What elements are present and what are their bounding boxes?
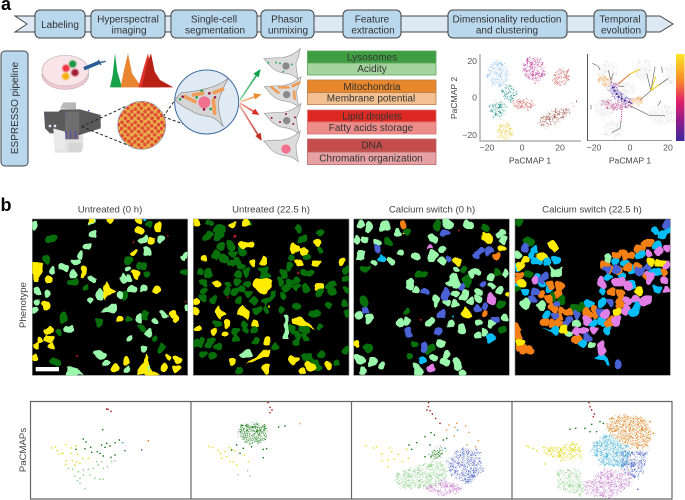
PaCMAP strip: [30, 402, 672, 499]
step: Hyperspectral imaging: [91, 10, 165, 38]
ESPRESSO pipeline side label: [1, 51, 28, 166]
feature rows: [308, 51, 436, 164]
arrow: to lipid droplets: [240, 103, 259, 115]
row: membrane potential: Membrane potential: [327, 94, 415, 104]
row label: Phenotype: Phenotype: [18, 282, 29, 328]
cell: DNA labelled: [264, 131, 300, 162]
icon: magnified single cell: [175, 70, 239, 134]
step: Labeling: [35, 10, 85, 38]
colour bar: [676, 54, 684, 141]
arrow: to mitochondria: [241, 93, 262, 102]
step: Hyperspectral imaging: Hyperspectral: [97, 14, 159, 26]
step: Phasor unmixing: [261, 10, 314, 38]
arrow: to DNA: [239, 105, 262, 141]
column title: Calcium switch 0 h: Calcium switch (0 h): [389, 204, 475, 216]
ESPRESSO pipeline side label: ESPRESSO pipeline: [10, 61, 21, 154]
step: Hyperspectral imaging: imaging: [111, 26, 147, 36]
row label: PaCMAPs: PaCMAPs: [18, 428, 29, 472]
tick labels: [462, 56, 565, 152]
icon: segmented cell field: [118, 101, 166, 149]
banner arrow band: [15, 16, 673, 32]
grey background clusters: [595, 59, 681, 139]
column title: Untreated 22.5 h: Untreated (22.5 h): [232, 204, 310, 216]
phenotype image: untreated 22.5 h: [193, 219, 349, 375]
chart: emission spectra: [110, 53, 173, 87]
schematic illustration: [42, 49, 301, 162]
step: Single-cell segmentation: Single-cell: [191, 14, 237, 26]
tick labels: [587, 142, 673, 152]
PaCMAP: calcium switch 0 h: [366, 403, 483, 496]
lineage trajectories: [591, 63, 668, 133]
step: Temporal evolution: [594, 10, 646, 38]
coloured pseudotime paths: [630, 69, 659, 91]
cell: lipid droplets labelled: [264, 103, 301, 134]
arrow: to lysosomes: [240, 69, 261, 100]
PaCMAP frame: [30, 402, 672, 499]
step: Feature extraction: Feature: [355, 14, 390, 26]
row: lipid droplets: Lipid droplets: [342, 112, 402, 122]
scatter plot: PaCMAP clusters: [449, 54, 581, 166]
tick labels: 0: [472, 92, 477, 102]
row: DNA: DNA: [361, 140, 383, 152]
column title: Calcium switch 22.5 h: Calcium switch (22.5 h): [542, 204, 642, 216]
step: Labeling: Labeling: [41, 20, 79, 31]
step: Feature extraction: [343, 10, 401, 38]
tick labels: 0: [628, 142, 633, 152]
row: acidity: Acidity: [357, 64, 387, 75]
icon: microscope: [44, 102, 101, 153]
phenotype image: calcium switch 22.5 h: [515, 219, 670, 375]
icon: zoom guide lines: [82, 100, 183, 147]
pipeline banner: [15, 10, 673, 38]
tick labels: −20: [587, 142, 602, 152]
step: Feature extraction: extraction: [351, 26, 395, 36]
step: Dimensionality reduction and clustering: Dimensionality reduction: [453, 14, 561, 26]
step: Single-cell segmentation: [171, 10, 257, 38]
step: Temporal evolution: evolution: [601, 26, 641, 36]
PaCMAP: untreated 22.5 h: [209, 403, 300, 476]
cell: mitochondria labelled: [264, 77, 301, 107]
axes: [480, 54, 581, 141]
step: Single-cell segmentation: segmentation: [185, 26, 245, 36]
cell: lysosome labelled: [264, 49, 300, 79]
tick labels: 20: [555, 142, 565, 152]
trajectory plot: [587, 54, 684, 166]
phenotype image: untreated 0 h: [32, 219, 188, 375]
row: fatty acids storage: Fatty acids storage: [329, 123, 414, 134]
step: Dimensionality reduction and clustering: [448, 10, 567, 38]
step: Temporal evolution: Temporal: [599, 14, 641, 26]
axis label x: PaCMAP 1: [509, 156, 551, 166]
panel letter b: b: [0, 195, 12, 215]
axis label x: PaCMAP 1: [609, 156, 651, 166]
icon: petri dish with syringe: [42, 55, 106, 89]
column title: Untreated 0 h: Untreated (0 h): [78, 204, 142, 216]
tick labels: 20: [663, 142, 673, 152]
step: Phasor unmixing: Phasor: [271, 14, 304, 26]
clusters: [487, 57, 574, 140]
tick labels: −20: [480, 142, 495, 152]
axes: [586, 54, 588, 141]
tick labels: 20: [467, 56, 477, 66]
PaCMAP: untreated 0 h: [52, 409, 148, 489]
tick labels: 0: [520, 142, 525, 152]
row: chromatin organization: Chromatin organization: [319, 154, 423, 164]
PaCMAP: calcium switch 22.5 h: [527, 403, 653, 498]
scale bar: [36, 367, 59, 371]
axis label y: PaCMAP 2: [449, 77, 459, 119]
row: mitochondria: Mitochondria: [343, 82, 401, 93]
phenotype image: calcium switch 0 h: [354, 219, 509, 375]
tick labels: −20: [462, 130, 477, 140]
row: lysosomes: Lysosomes: [347, 52, 397, 64]
step: Dimensionality reduction and clustering: and clustering: [476, 26, 538, 36]
step: Phasor unmixing: unmixing: [268, 26, 308, 36]
